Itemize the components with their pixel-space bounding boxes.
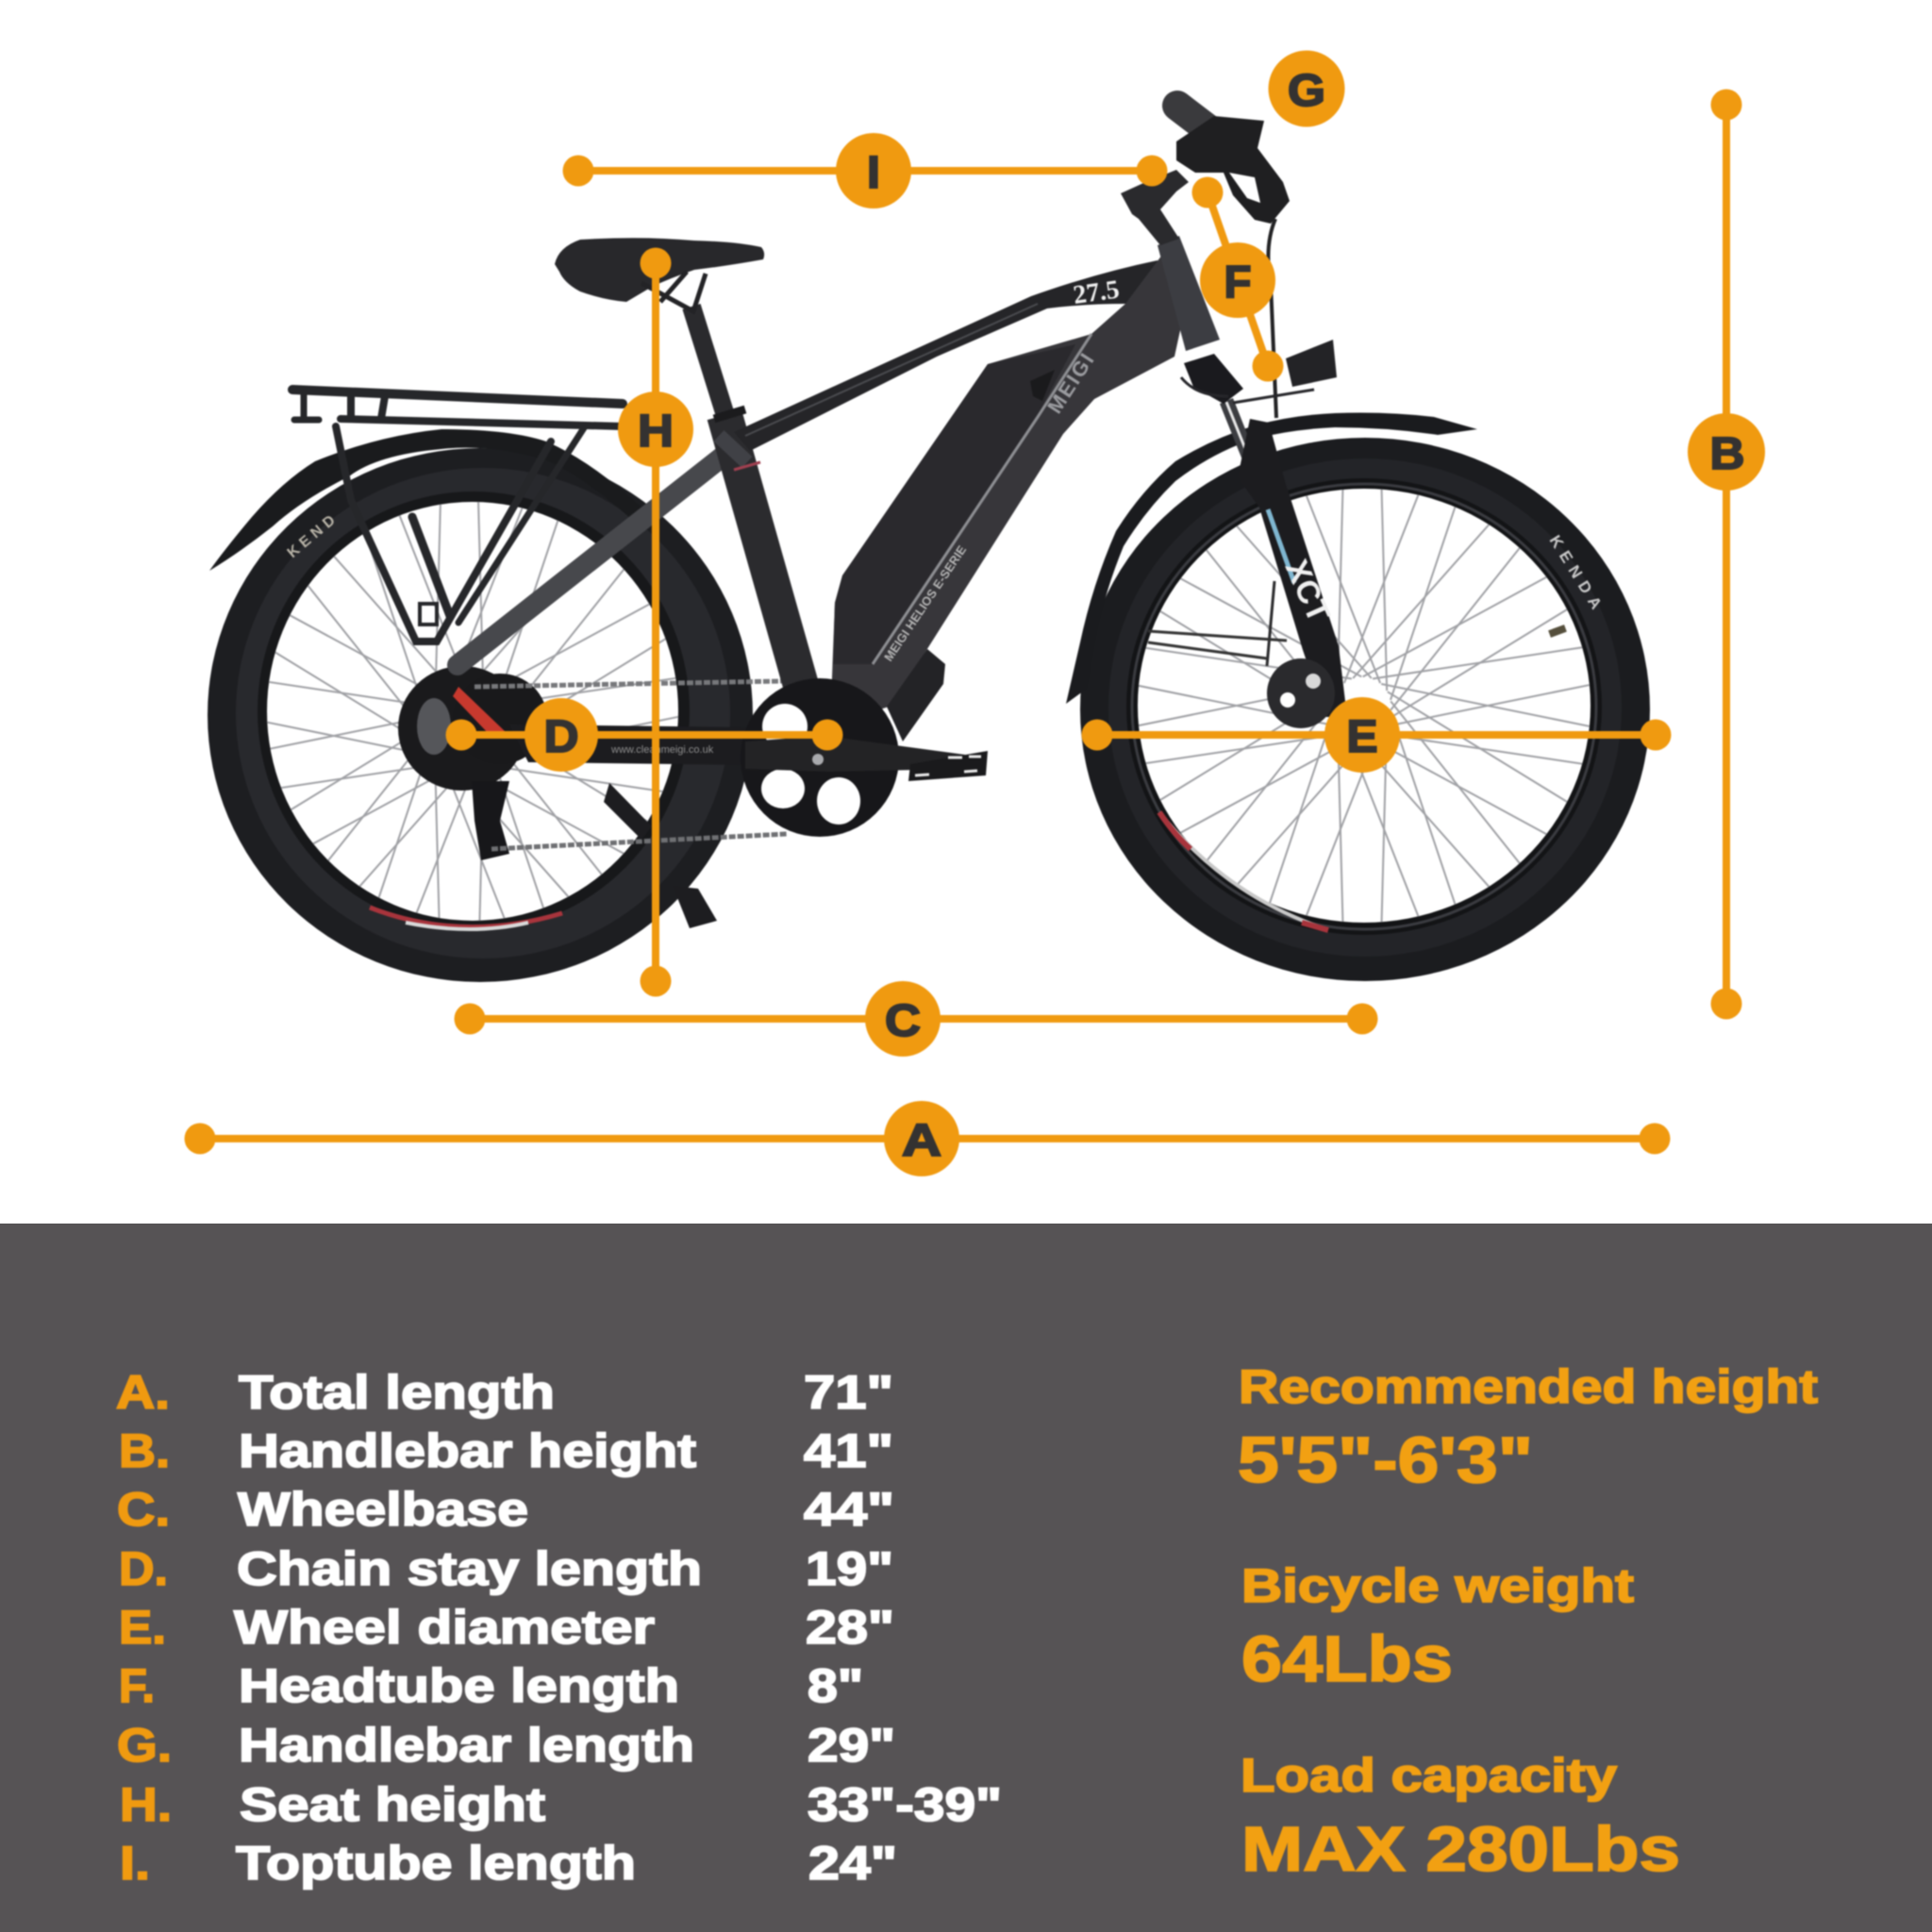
fork: XCT (1278, 555, 1337, 628)
row F: Headtube length (239, 1659, 679, 1712)
row B (119, 1424, 893, 1477)
frame number 27.5: 27.5 (1072, 275, 1121, 310)
row A: A. (116, 1366, 170, 1419)
tire lettering: front KENDA: KENDA (1546, 532, 1608, 618)
bicycle weight: 64Lbs (1241, 1623, 1453, 1695)
row H (120, 1778, 1002, 1831)
saddle (555, 238, 764, 311)
bicycle illustration (207, 90, 1651, 983)
row A: 71" (804, 1366, 893, 1419)
row F: F. (119, 1659, 155, 1712)
dimension D: chain stay length: D (543, 712, 579, 762)
frame logo: MEIGI (1042, 347, 1100, 418)
row E: Wheel diameter (234, 1601, 655, 1654)
dimension A: total length (185, 1101, 1670, 1176)
dimension I: toptube length (562, 133, 1168, 208)
dimension G: handlebar length: G (1288, 66, 1325, 116)
seat stay (458, 453, 727, 665)
spec list (116, 1366, 1002, 1890)
seat tube (691, 307, 728, 425)
panel: specifications background (0, 1224, 1932, 1932)
front wheel (1079, 437, 1651, 982)
row G: Handlebar length (239, 1719, 694, 1772)
row I (120, 1837, 897, 1890)
front mudguard (1066, 413, 1477, 704)
row H: 33"-39" (808, 1778, 1002, 1831)
row B: B. (119, 1424, 170, 1477)
white background (0, 0, 1932, 1224)
rear mudguard (209, 429, 652, 571)
dimension C: wheelbase (455, 981, 1377, 1057)
row F: 8" (808, 1659, 863, 1712)
recommended height (1238, 1360, 1818, 1496)
dimension E: wheel diameter: E (1347, 712, 1377, 762)
row A (116, 1366, 893, 1419)
dimension B: handlebar height (1688, 89, 1765, 1019)
dimension G: handlebar length (1268, 51, 1345, 126)
row I: I. (120, 1837, 150, 1890)
row D: 19" (806, 1542, 893, 1595)
chainring and crank (741, 678, 988, 837)
dimension H: seat height (618, 247, 693, 996)
down tube (830, 255, 1191, 726)
row C (117, 1483, 894, 1536)
dimension E: wheel diameter (1081, 697, 1672, 773)
row H: H. (120, 1778, 172, 1831)
row E: 28" (806, 1601, 894, 1654)
row D (119, 1542, 893, 1595)
dimension F: headtube length: F (1224, 258, 1251, 308)
row A: Total length (239, 1366, 555, 1419)
fork (1148, 398, 1347, 728)
dimension I: toptube length: I (867, 148, 880, 198)
frame text: MEIGI HELIOS E-SERIE (881, 542, 969, 664)
stem (1121, 170, 1189, 245)
row B: Handlebar height (239, 1424, 696, 1477)
load capacity (1241, 1749, 1680, 1885)
rear wheel (207, 447, 754, 983)
drivetrain: cassette, derailleur, chain: www.cleanmeigi.co.uk (610, 744, 714, 756)
row B: 41" (804, 1424, 893, 1477)
brake cable (1268, 219, 1276, 418)
dimension B: handlebar height: B (1709, 429, 1745, 479)
load capacity: MAX 280Lbs (1241, 1814, 1680, 1885)
head tube (1158, 236, 1220, 351)
row C: C. (117, 1483, 170, 1536)
kickstand (604, 783, 717, 928)
handlebar grip and controls (1176, 106, 1290, 224)
row E (119, 1601, 894, 1654)
row G: G. (117, 1719, 172, 1772)
bicycle weight: Bicycle weight (1241, 1559, 1634, 1612)
row H: Seat height (240, 1778, 545, 1831)
top tube (734, 260, 1170, 451)
load capacity: Load capacity (1241, 1749, 1617, 1802)
row C: Wheelbase (238, 1483, 528, 1536)
recommended height: 5'5"-6'3" (1238, 1424, 1533, 1496)
motor (887, 649, 945, 741)
dimension A: total length: A (902, 1116, 941, 1166)
row D: D. (119, 1542, 168, 1595)
recommended height: Recommended height (1239, 1360, 1818, 1413)
row G (117, 1719, 895, 1772)
dimension H: seat height: H (638, 407, 674, 457)
bicycle weight (1241, 1559, 1634, 1695)
row F (119, 1659, 863, 1712)
row E: E. (119, 1601, 166, 1654)
row G: 29" (808, 1719, 895, 1772)
battery (833, 344, 1075, 664)
row I: 24" (808, 1837, 897, 1890)
row D: Chain stay length (237, 1542, 702, 1595)
dimension F: headtube length (1192, 177, 1283, 381)
rear rack (292, 390, 623, 641)
row I: Toptube length (236, 1837, 636, 1890)
row C: 44" (804, 1483, 894, 1536)
tire lettering: rear KENDA: KEND (285, 509, 342, 561)
drivetrain: cassette, derailleur, chain (398, 666, 830, 860)
headlight (1181, 340, 1337, 403)
dimension D: chain stay length (445, 698, 843, 772)
dimension C: wheelbase: C (885, 996, 921, 1046)
